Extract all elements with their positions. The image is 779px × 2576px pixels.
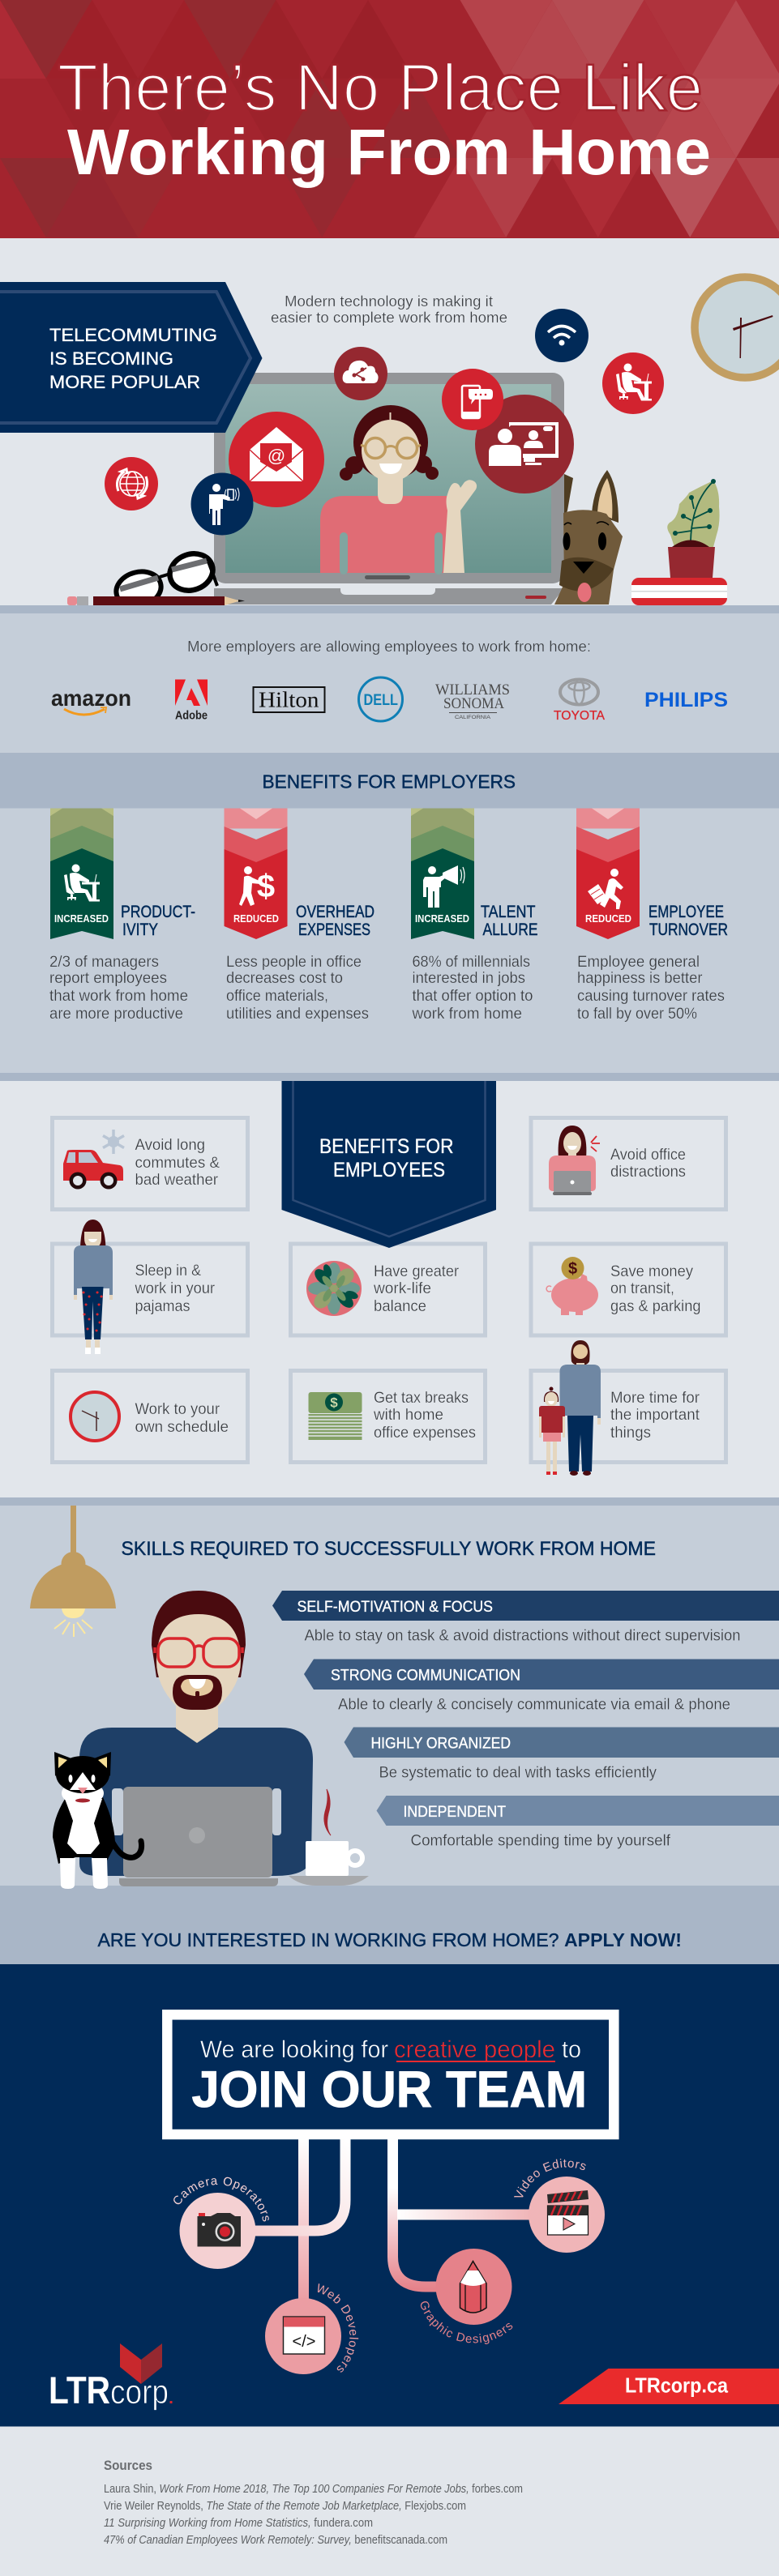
- description: are more productive: [49, 1006, 183, 1023]
- icon: wifi: [535, 309, 589, 362]
- ribbon: increased: [50, 809, 113, 939]
- role: web developers: Web Developers: [318, 2283, 358, 2373]
- card: avoid commutes: bad weather: [135, 1172, 219, 1189]
- card: pajamas: [52, 1220, 248, 1354]
- skill: organized: [344, 1728, 779, 1781]
- icon: wall clock: [71, 1392, 119, 1441]
- description: [226, 954, 369, 1023]
- card: tax breaks: with home: [373, 1407, 443, 1424]
- pennant: benefits for employees: BENEFITS FOR: [319, 1135, 454, 1158]
- icon: hanging lamp: [30, 1506, 116, 1637]
- ribbon: increased: INCREASED: [54, 912, 109, 925]
- panel: turnover benefit: [576, 809, 728, 1023]
- description: decreases cost to: [226, 970, 343, 987]
- logo: amazon: amazon: [51, 686, 131, 711]
- panel: productivity benefit: [49, 809, 195, 1023]
- card: schedule: Work to your: [135, 1401, 220, 1418]
- icon: piggy bank: [546, 1257, 598, 1315]
- ribbon: reduced: REDUCED: [233, 912, 279, 925]
- card: avoid commutes: [52, 1118, 248, 1209]
- pennant: benefits for employees: [282, 1081, 496, 1248]
- panel: join our team: [0, 1964, 779, 2426]
- panel: productivity benefit: PRODUCT-: [121, 903, 195, 921]
- logo: dell: [358, 677, 402, 721]
- skill: self-motivation: [272, 1591, 779, 1645]
- icon: clapperboard: [547, 2190, 589, 2235]
- logo: toyota: TOYOTA: [554, 709, 605, 723]
- pennant: benefits for employees: EMPLOYEES: [333, 1159, 445, 1181]
- skill: communication: [304, 1660, 779, 1713]
- triangle pattern: [0, 0, 779, 237]
- icon: worker at desk: [602, 352, 664, 414]
- panel: sources: 47% of Canadian Employees Work Remotely: Survey, benefitscanada.com: [104, 2534, 447, 2547]
- description: office materials,: [226, 988, 328, 1005]
- card: pajamas: work in your: [135, 1280, 216, 1297]
- description: interested in jobs: [412, 970, 525, 987]
- description: work from home: [412, 1006, 522, 1023]
- icon: code window: </>: [293, 2333, 315, 2351]
- icon: email: @: [268, 446, 285, 466]
- panel: sources: 11 Surprising Working from Home Statistics, fundera.com: [104, 2517, 373, 2530]
- website tag: LTRcorp.ca: [625, 2373, 728, 2397]
- card: more time: things: [610, 1425, 651, 1442]
- icon: email: [229, 412, 324, 507]
- card: avoid commutes: commutes &: [135, 1155, 220, 1172]
- icon: person with megaphone: [423, 865, 464, 908]
- sign: join our team: JOIN OUR TEAM: [191, 2061, 587, 2118]
- icon: person leaving with bag: [588, 869, 623, 909]
- panel: talent allure benefit: TALENT: [481, 903, 536, 921]
- panel: title header: [0, 0, 779, 238]
- dog: [554, 470, 623, 604]
- card: tax breaks: Get tax breaks: [374, 1390, 469, 1407]
- title line 2: Working From Home: [67, 116, 711, 188]
- icon: person pushing dollar: $: [257, 869, 275, 904]
- pipes: [251, 2139, 535, 2305]
- description: that work from home: [49, 988, 188, 1005]
- panel: overhead benefit: OVERHEAD: [296, 903, 375, 921]
- card: schedule: own schedule: [135, 1419, 229, 1436]
- card: save money: on transit,: [610, 1280, 674, 1297]
- logo: philips: PHILIPS: [644, 689, 728, 711]
- ribbon: reduced: REDUCED: [585, 912, 631, 925]
- sign: join our team: We are looking for: [200, 2036, 388, 2063]
- ribbon: reduced: [576, 809, 640, 939]
- description: to fall by over 50%: [577, 1006, 697, 1023]
- title line 1: There’s No Place Like: [58, 51, 703, 125]
- role: graphic designers: [420, 2249, 512, 2344]
- description: [49, 954, 188, 1023]
- heading: skills required: SKILLS REQUIRED TO SUCCESSFULLY WORK FROM HOME: [122, 1538, 656, 1560]
- panel: benefits for employees: [52, 1081, 726, 1476]
- card: save money: Save money: [610, 1263, 693, 1280]
- heading: benefits for employers: BENEFITS FOR EMPLOYERS: [263, 771, 516, 792]
- intro text: [271, 293, 507, 326]
- description: Employee general: [577, 954, 700, 971]
- logo: williams sonoma: SONOMA: [443, 695, 504, 712]
- icon: snowflake: [103, 1130, 124, 1154]
- card: avoid commutes: Avoid long: [135, 1137, 205, 1154]
- panel: talent allure benefit: ALLURE: [483, 921, 538, 939]
- description: 2/3 of managers: [49, 954, 159, 971]
- card: more time: More time for: [610, 1390, 700, 1407]
- icon: father and daughter: [539, 1340, 601, 1476]
- panel: hero telecommuting scene: [0, 277, 779, 612]
- card: work-life balance: balance: [374, 1298, 426, 1315]
- skill: self-motivation: Able to stay on task & avoid distractions without direct supervision: [305, 1627, 741, 1645]
- logo: adobe: Adobe: [175, 708, 208, 723]
- role: camera operators: [173, 2177, 269, 2269]
- sign: join our team: creative people: [394, 2036, 555, 2063]
- description: that offer option to: [412, 988, 533, 1005]
- icon: piggy bank: $: [568, 1260, 577, 1278]
- card: avoid distractions: distractions: [610, 1164, 686, 1181]
- ribbon: increased: [411, 809, 474, 939]
- skill: communication: Able to clearly & concisely communicate via email & phone: [338, 1697, 730, 1713]
- role: video editors: Video Editors: [514, 2159, 586, 2198]
- skill: independent: Comfortable spending time by yourself: [410, 1833, 671, 1849]
- website tag: [559, 2369, 779, 2404]
- logo: williams sonoma: CALIFORNIA: [455, 716, 490, 720]
- call to action text: APPLY NOW!: [564, 1929, 682, 1950]
- panel: overhead benefit: EXPENSES: [298, 921, 370, 939]
- card: avoid distractions: [531, 1118, 726, 1209]
- icon: person with phone: [191, 473, 253, 535]
- description: [412, 954, 533, 1023]
- sign: join our team: to: [562, 2036, 581, 2063]
- laptop: [214, 373, 564, 604]
- description: happiness is better: [577, 970, 703, 987]
- clock: [695, 277, 779, 378]
- panel: overhead benefit: [224, 809, 375, 1023]
- panel: turnover benefit: TURNOVER: [649, 921, 728, 939]
- ribbon: reduced: [224, 809, 287, 939]
- role: camera operators: Camera Operators: [173, 2177, 269, 2222]
- text: more employers: More employers are allowing employees to work from home:: [187, 639, 591, 655]
- plant and books: [631, 479, 727, 605]
- card: pajamas: Sleep in &: [135, 1262, 201, 1279]
- panel: talent allure benefit: [411, 809, 538, 1023]
- role: video editors: [514, 2159, 605, 2253]
- ribbon: increased: INCREASED: [415, 912, 469, 925]
- role: web developers: [265, 2283, 358, 2374]
- panel: turnover benefit: EMPLOYEE: [648, 903, 724, 921]
- logo: hilton: Hilton: [259, 687, 319, 711]
- icon: money stack: [308, 1392, 362, 1440]
- icon: car: [63, 1150, 123, 1190]
- sign: join our team: [167, 2014, 614, 2134]
- icon: woman in pajamas: [74, 1220, 113, 1354]
- icon: coffee cup: [289, 1789, 369, 1886]
- role: graphic designers: Graphic Designers: [420, 2301, 512, 2344]
- woman on screen: [320, 405, 477, 575]
- logo: williams sonoma: WILLIAMS: [435, 681, 510, 698]
- skill: communication: STRONG COMMUNICATION: [331, 1668, 520, 1684]
- panel: productivity benefit: IVITY: [122, 921, 158, 939]
- intro text: easier to complete work from home: [271, 310, 507, 326]
- card: pajamas: pajamas: [135, 1298, 190, 1315]
- card: work-life balance: [290, 1244, 485, 1335]
- icon: person pushing dollar: [239, 866, 275, 906]
- icon: cat: [53, 1752, 142, 1889]
- description: 68% of millennials: [412, 954, 530, 971]
- icon: globe: [105, 457, 158, 511]
- man with laptop: [79, 1591, 313, 1886]
- skill: organized: HIGHLY ORGANIZED: [371, 1736, 511, 1752]
- logo: LTR corp: LTR: [49, 2369, 110, 2412]
- logo: dell: DELL: [363, 692, 398, 709]
- card: schedule: [52, 1371, 248, 1462]
- card: tax breaks: office expenses: [374, 1425, 476, 1442]
- card: work-life balance: work-life: [373, 1280, 431, 1297]
- description: Less people in office: [226, 954, 362, 971]
- intro text: Modern technology is making it: [285, 293, 493, 310]
- logo: williams sonoma: [435, 681, 510, 720]
- man's laptop: [119, 1787, 278, 1886]
- pencil: [67, 596, 245, 605]
- panel: sources: [104, 2458, 523, 2547]
- skill: independent: INDEPENDENT: [404, 1804, 506, 1821]
- card: save money: [531, 1244, 726, 1335]
- call to action text: ARE YOU INTERESTED IN WORKING FROM HOME?: [97, 1929, 559, 1950]
- glasses on desk: [113, 548, 218, 612]
- logo: toyota: [554, 679, 605, 723]
- icon: potted plant top view: [306, 1261, 362, 1316]
- icon: pencil: [460, 2261, 486, 2313]
- logo: LTR corp: corp: [110, 2373, 169, 2411]
- icon: woman with laptop: [549, 1126, 600, 1195]
- description: report employees: [49, 970, 167, 987]
- skill: organized: Be systematic to deal with tasks efficiently: [379, 1765, 657, 1781]
- icon: camera: [198, 2213, 241, 2246]
- description: causing turnover rates: [577, 988, 725, 1005]
- panel: sources: Laura Shin, Work From Home 2018, The Top 100 Companies For Remote Jobs, forbes.com: [104, 2483, 523, 2496]
- panel: skills background: [0, 1497, 779, 1964]
- panel: sources: Sources: [104, 2458, 152, 2473]
- skill: independent: [376, 1796, 779, 1849]
- skill: self-motivation: SELF-MOTIVATION & FOCUS: [297, 1599, 493, 1616]
- logo: LTR corp: [49, 2343, 172, 2412]
- icon: video call: [475, 395, 574, 493]
- description: [577, 954, 725, 1023]
- banner: telecommuting: IS BECOMING: [49, 348, 173, 369]
- panel: employers logos and benefits background: [0, 605, 779, 1081]
- icon: phone chat: [442, 369, 503, 430]
- card: more time: the important: [610, 1407, 700, 1424]
- description: utilities and expenses: [226, 1006, 369, 1023]
- card: work-life balance: Have greater: [374, 1263, 460, 1280]
- banner: telecommuting: [0, 282, 263, 433]
- icon: money stack: $: [330, 1395, 338, 1410]
- banner: telecommuting: TELECOMMUTING: [49, 325, 217, 345]
- card: more time: [531, 1340, 726, 1476]
- card: save money: gas & parking: [610, 1298, 700, 1315]
- card: tax breaks: [290, 1371, 485, 1462]
- icon: cloud share: [334, 347, 387, 400]
- banner: telecommuting: MORE POPULAR: [49, 372, 200, 392]
- card: avoid distractions: Avoid office: [610, 1147, 686, 1164]
- panel: sources: Vrie Weiler Reynolds, The State of the Remote Job Marketplace, Flexjobs.com: [104, 2500, 466, 2513]
- logo: adobe: [175, 679, 208, 723]
